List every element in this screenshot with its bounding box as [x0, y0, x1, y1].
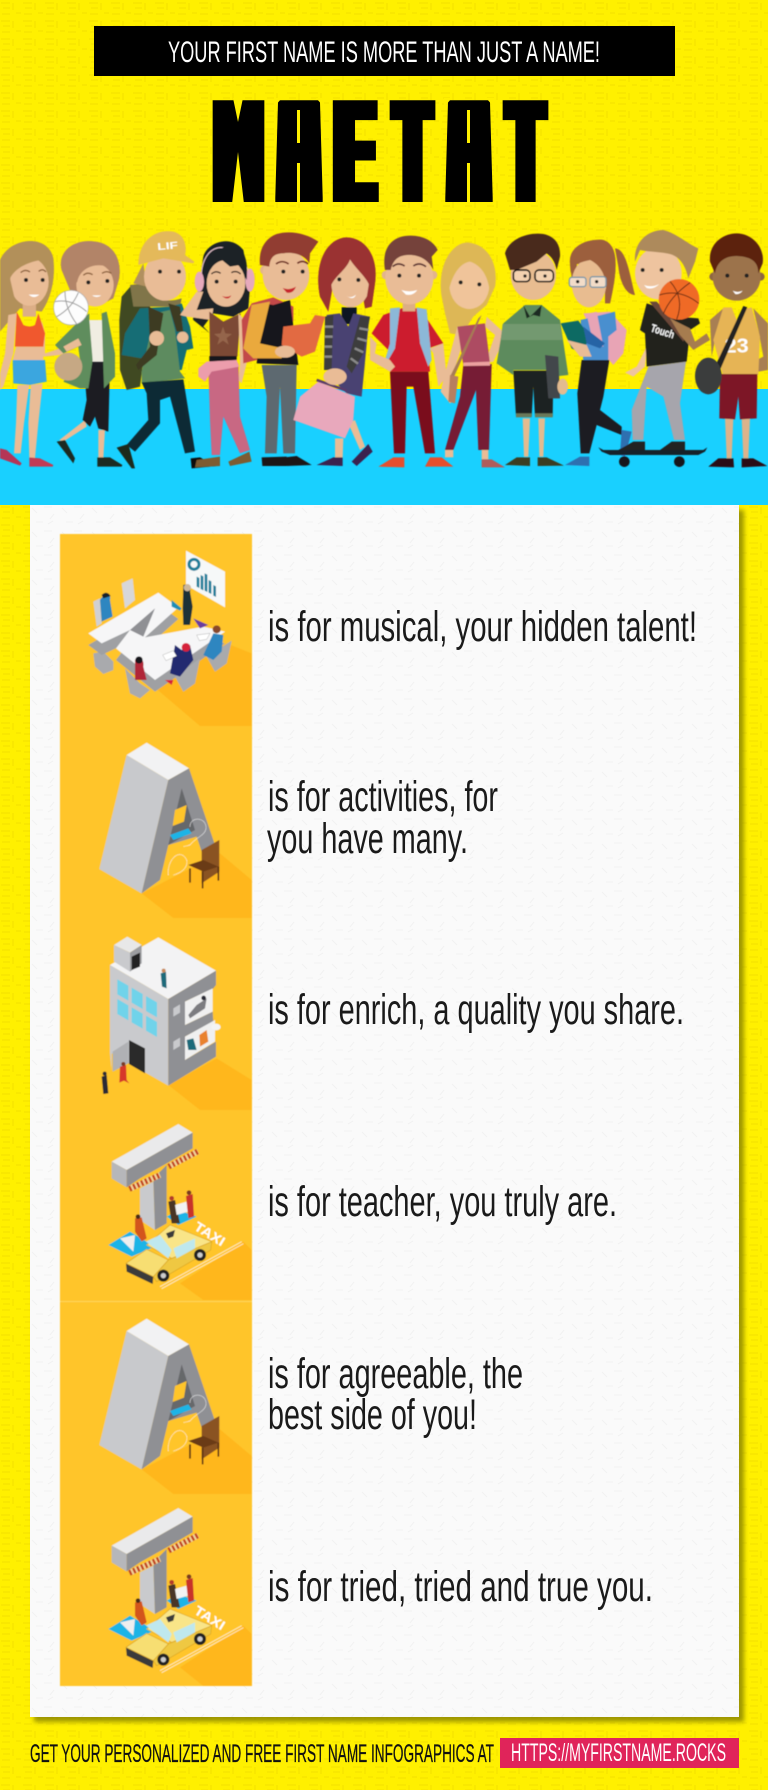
icon: letter T with taxi: [108, 1124, 252, 1300]
person: girl in green jacket with volleyball: [54, 241, 122, 467]
title: name MAETAT: A: [465, 72, 473, 231]
title: name MAETAT: [222, 72, 543, 231]
person: boy in tank top with shoulder bag: 23: [725, 335, 749, 358]
title: name MAETAT: M: [222, 72, 255, 231]
person: girl with headphones: [180, 241, 255, 467]
icon: letter A with desk and chair: [99, 743, 252, 918]
person: boy in tank top with shoulder bag: [695, 233, 768, 467]
title: name MAETAT: T: [395, 72, 430, 231]
person: boy reading a book: [242, 232, 325, 466]
illustration: group of people: [0, 230, 768, 468]
text block: A line: [267, 773, 498, 863]
icon: letter M meeting table: [88, 551, 252, 726]
person: boy in red shirt: [370, 236, 453, 467]
title: name MAETAT: A: [295, 72, 303, 231]
main white panel: [30, 505, 744, 1722]
text block: A line: you have many.: [267, 815, 468, 863]
text block: second A line: best side of you!: [268, 1391, 477, 1439]
icon: letter T with taxi: TAXI: [192, 1219, 228, 1249]
person: girl with ponytail and tablet: [561, 240, 635, 466]
person: hiker with cap and backpack: LIF: [157, 240, 178, 253]
text block: A line: is for activities, for: [268, 773, 498, 821]
icon: letter T with taxi (repeat): TAXI: [192, 1603, 228, 1633]
person: girl with pink bag: [293, 237, 376, 466]
people left half: [0, 231, 376, 468]
icon: letter E office building: [102, 937, 252, 1110]
tagline banner: [94, 26, 675, 76]
icon: letter A with desk and chair (repeat): [99, 1319, 252, 1494]
person: boy with glasses: [497, 234, 568, 466]
title: name MAETAT: E: [336, 72, 374, 231]
yellow icon column: [60, 534, 252, 1686]
text block: second A line: is for agreeable, the: [268, 1350, 523, 1398]
person: blonde girl: [441, 243, 507, 467]
icon: letter T with taxi (repeat): [108, 1508, 252, 1686]
person: boy on skateboard with basketball: [598, 230, 710, 467]
person: girl in orange top: [0, 241, 82, 467]
person: hiker with cap and backpack: [117, 231, 217, 468]
people right half: [370, 230, 768, 467]
text: T: [508, 72, 543, 231]
person: boy on skateboard with basketball: Touch: [649, 323, 676, 342]
blue floor band: [0, 389, 768, 505]
text block: second A line: [268, 1350, 523, 1439]
